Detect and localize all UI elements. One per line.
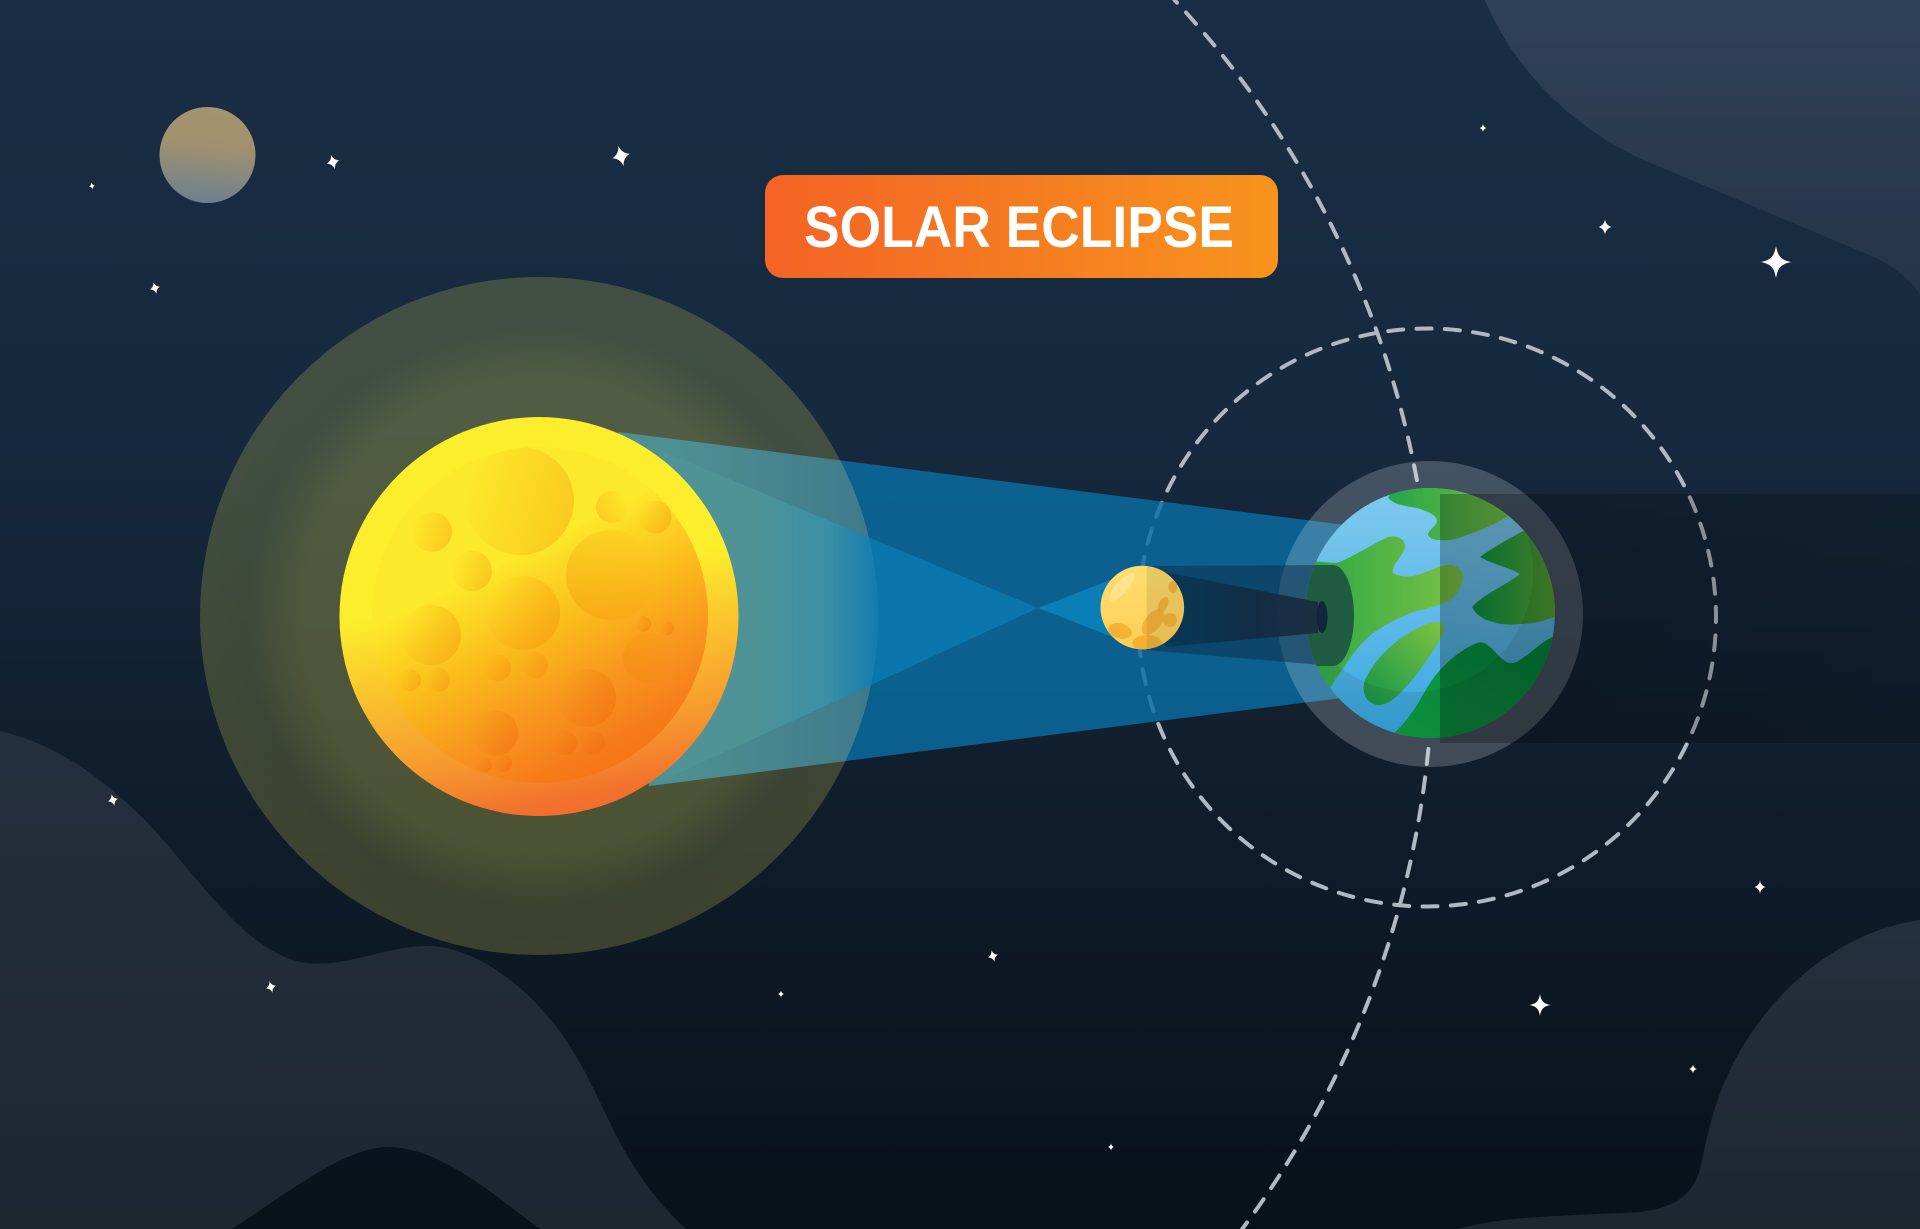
sun — [340, 417, 738, 816]
orbit: moon around earth — [1138, 328, 1716, 906]
sun craters — [399, 447, 674, 772]
land: central continent — [1306, 536, 1463, 688]
sun inner disc — [372, 447, 708, 783]
corona glow around sun — [200, 277, 878, 955]
sunlight beam — [618, 432, 1345, 786]
moon — [1100, 566, 1184, 650]
title text: SOLAR ECLIPSE — [804, 195, 1234, 260]
penumbra behind moon — [1146, 565, 1333, 666]
earth night-side shadow band — [1440, 494, 1920, 743]
moon disc — [1100, 566, 1184, 649]
converging light cone: sun to crossing point — [660, 450, 1038, 782]
moon highlight — [1109, 573, 1135, 601]
earth — [1306, 488, 1555, 738]
background blob: bottom left — [0, 731, 686, 1229]
land: island — [1364, 622, 1444, 705]
moon shadow patch on earth — [1305, 565, 1354, 666]
sun outer disc — [340, 417, 738, 816]
stars — [88, 124, 1791, 1150]
orbit: large solar arc — [1174, 0, 1433, 1229]
background blob: bottom right — [1457, 920, 1920, 1229]
earth atmosphere halo — [1277, 461, 1583, 767]
title badge — [765, 175, 1278, 278]
moon craters — [1106, 581, 1178, 651]
converging light cone: crossing point to moon — [1038, 566, 1146, 650]
land: right continent — [1472, 531, 1555, 625]
lower-right limb shading — [1317, 536, 1555, 738]
land: top continent — [1388, 488, 1508, 540]
background blob: top right — [1485, 0, 1920, 294]
ocean — [1305, 488, 1555, 738]
moon shaded half — [1146, 566, 1184, 649]
land: bottom continent — [1394, 637, 1553, 738]
umbra cone — [1165, 572, 1318, 647]
sunlight beam inside corona — [618, 432, 871, 786]
distant planet — [160, 107, 256, 203]
umbra tip on earth — [1316, 601, 1328, 633]
